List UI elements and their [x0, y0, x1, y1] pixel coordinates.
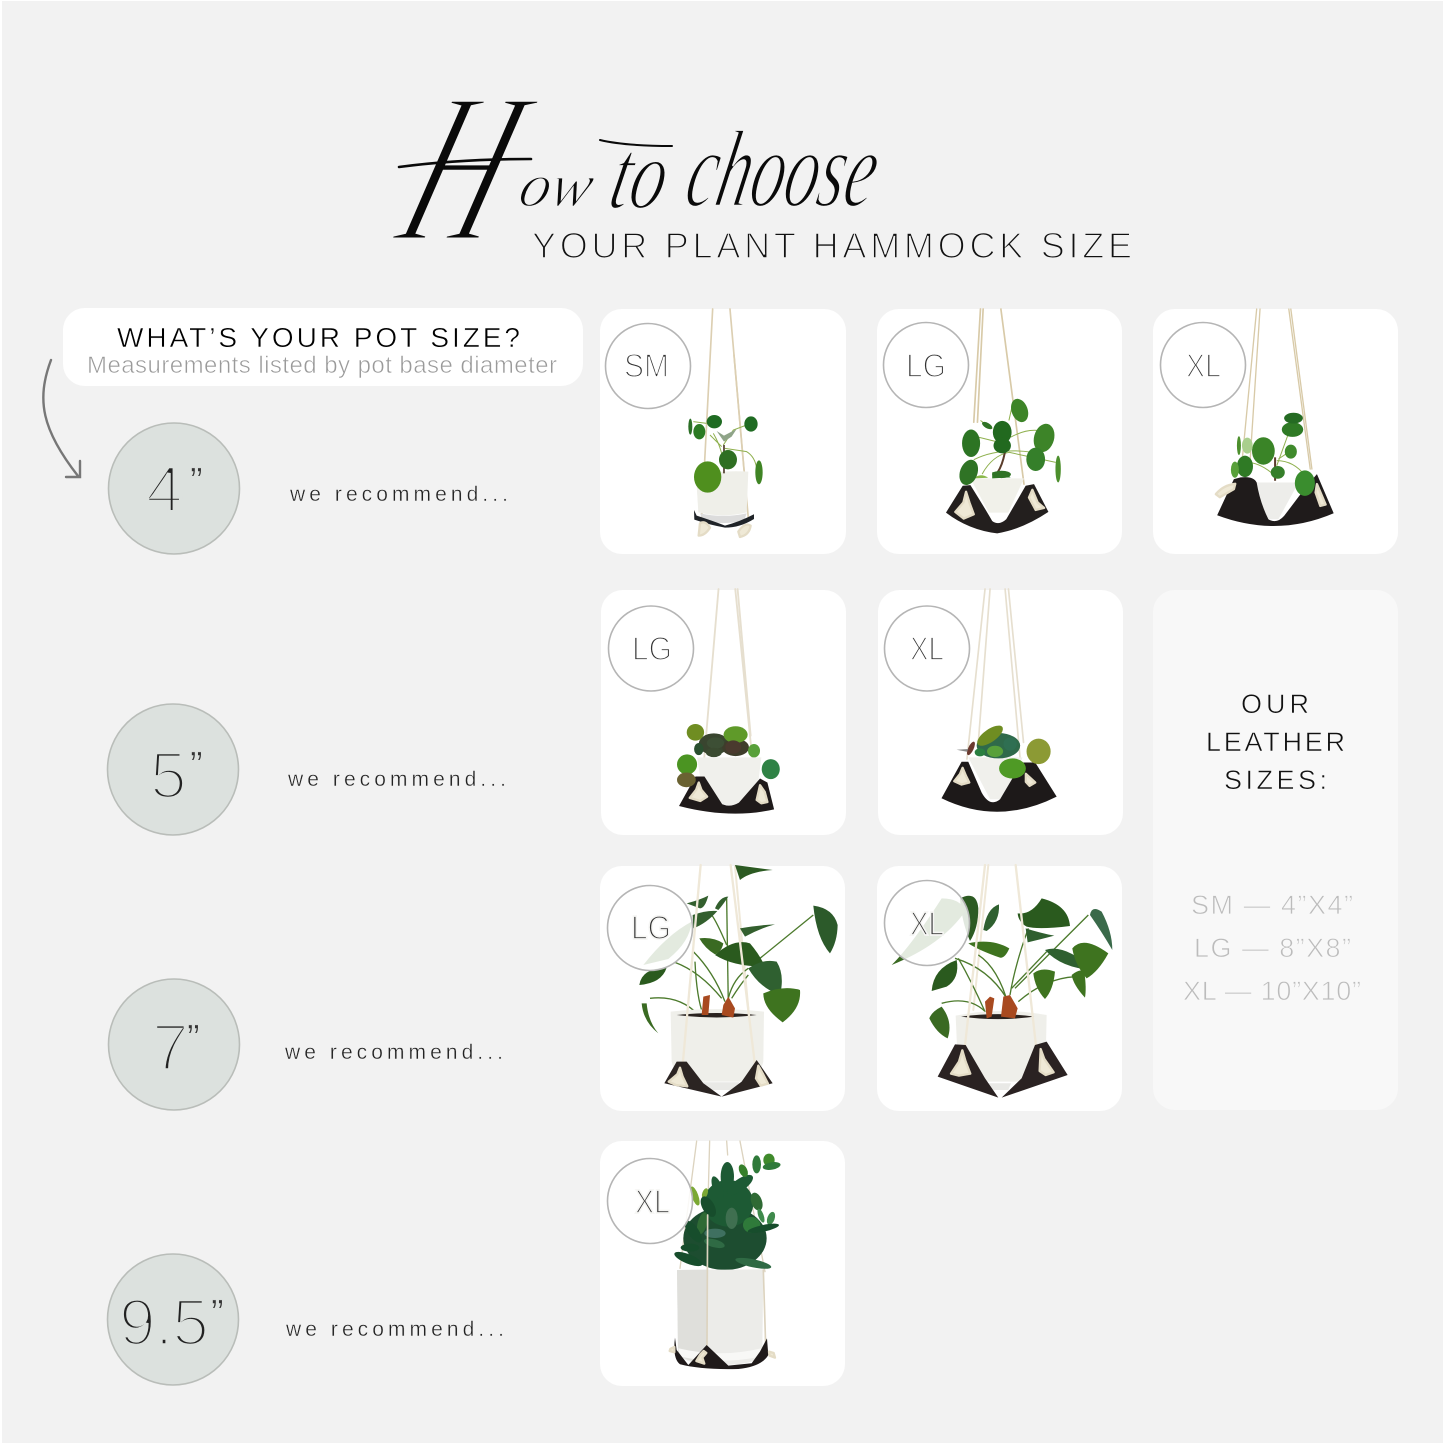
recommendation text: we recommend... — [289, 483, 508, 506]
panel: leather sizes — [1153, 590, 1398, 1110]
size badge: XL: XL — [1186, 347, 1221, 384]
pot size row: 7 inch — [108, 979, 503, 1110]
pot size row: 4 inch: ” — [190, 461, 203, 503]
recommendation text: we recommend... — [284, 1041, 503, 1064]
measurement note: Measurements listed by pot base diameter — [87, 352, 557, 379]
plant photo illustration — [670, 1141, 781, 1369]
title script line: to — [601, 120, 679, 231]
size badge: SM — [606, 324, 690, 408]
size badge: XL — [1160, 322, 1246, 408]
pot size row: 4 inch: 4 — [146, 452, 183, 526]
recommendation text: we recommend... — [285, 1318, 504, 1341]
size badge: XL — [884, 880, 970, 966]
pot size row: 7 inch: ” — [187, 1018, 200, 1060]
pot size row: 5 inch — [108, 704, 506, 835]
heading: WHAT’S YOUR POT SIZE? — [117, 322, 520, 353]
size badge: XL: XL — [635, 1183, 670, 1220]
pot size row: 4 inch — [108, 423, 508, 554]
size badge: SM: SM — [624, 347, 669, 384]
plant photo illustration — [688, 309, 763, 537]
pot size row: 5 inch: 5 — [150, 738, 187, 812]
size badge: LG: LG — [631, 909, 671, 946]
size badge: XL — [884, 606, 970, 691]
leather size list: XL — 10”X10” — [1183, 976, 1361, 1006]
plant photo illustration — [892, 865, 1112, 1098]
size badge: XL: XL — [910, 905, 944, 942]
pot size row: 9.5 inch: 9.5 — [119, 1285, 209, 1359]
plant photo illustration — [639, 865, 838, 1097]
size badge: LG: LG — [632, 630, 672, 667]
leather sizes heading: LEATHER — [1206, 727, 1345, 757]
leather sizes heading: OUR — [1241, 689, 1309, 719]
plant photo illustration — [677, 589, 780, 814]
panel: 4 inch SM hammock — [600, 309, 846, 554]
panel: 4 inch XL hammock — [1153, 309, 1398, 554]
pot size row: 7 inch: 7 — [152, 1010, 189, 1084]
title script line — [375, 50, 891, 288]
size badge: LG: LG — [906, 347, 946, 384]
size badge: XL — [608, 1158, 692, 1244]
plant photo illustration — [946, 309, 1061, 533]
panel: pot size heading — [63, 308, 583, 386]
size badge: LG — [608, 606, 694, 691]
leather size list: LG — 8”X8” — [1194, 933, 1351, 963]
leather sizes heading: SIZES: — [1224, 765, 1327, 795]
pot size row: 9.5 inch: ” — [211, 1293, 224, 1335]
panel: 4 inch LG hammock — [877, 309, 1122, 554]
panel: 5 inch LG hammock — [601, 589, 846, 835]
plant photo illustration — [941, 589, 1057, 812]
panel: 9.5 inch XL hammock — [600, 1141, 845, 1386]
arrow — [43, 360, 80, 477]
title script line: choose — [677, 109, 891, 231]
title script line: ow — [513, 151, 602, 220]
plant photo illustration — [1216, 309, 1334, 526]
title — [375, 50, 1132, 288]
leather sizes heading — [1206, 689, 1345, 795]
title script line: H — [375, 50, 556, 288]
leather size list — [1183, 890, 1361, 1006]
size badge: XL: XL — [910, 630, 944, 667]
subtitle: YOUR PLANT HAMMOCK SIZE — [532, 225, 1132, 266]
pot size row: 5 inch: ” — [190, 745, 203, 787]
pot size row: 9.5 inch — [108, 1254, 504, 1385]
size badge: LG — [608, 886, 692, 970]
recommendation text: we recommend... — [287, 768, 506, 791]
size badge: LG — [884, 322, 968, 408]
panel: 7 inch XL hammock — [877, 865, 1122, 1111]
leather size list: SM — 4”X4” — [1191, 890, 1353, 920]
panel: 5 inch XL hammock — [878, 589, 1123, 835]
panel: 7 inch LG hammock — [600, 865, 845, 1111]
